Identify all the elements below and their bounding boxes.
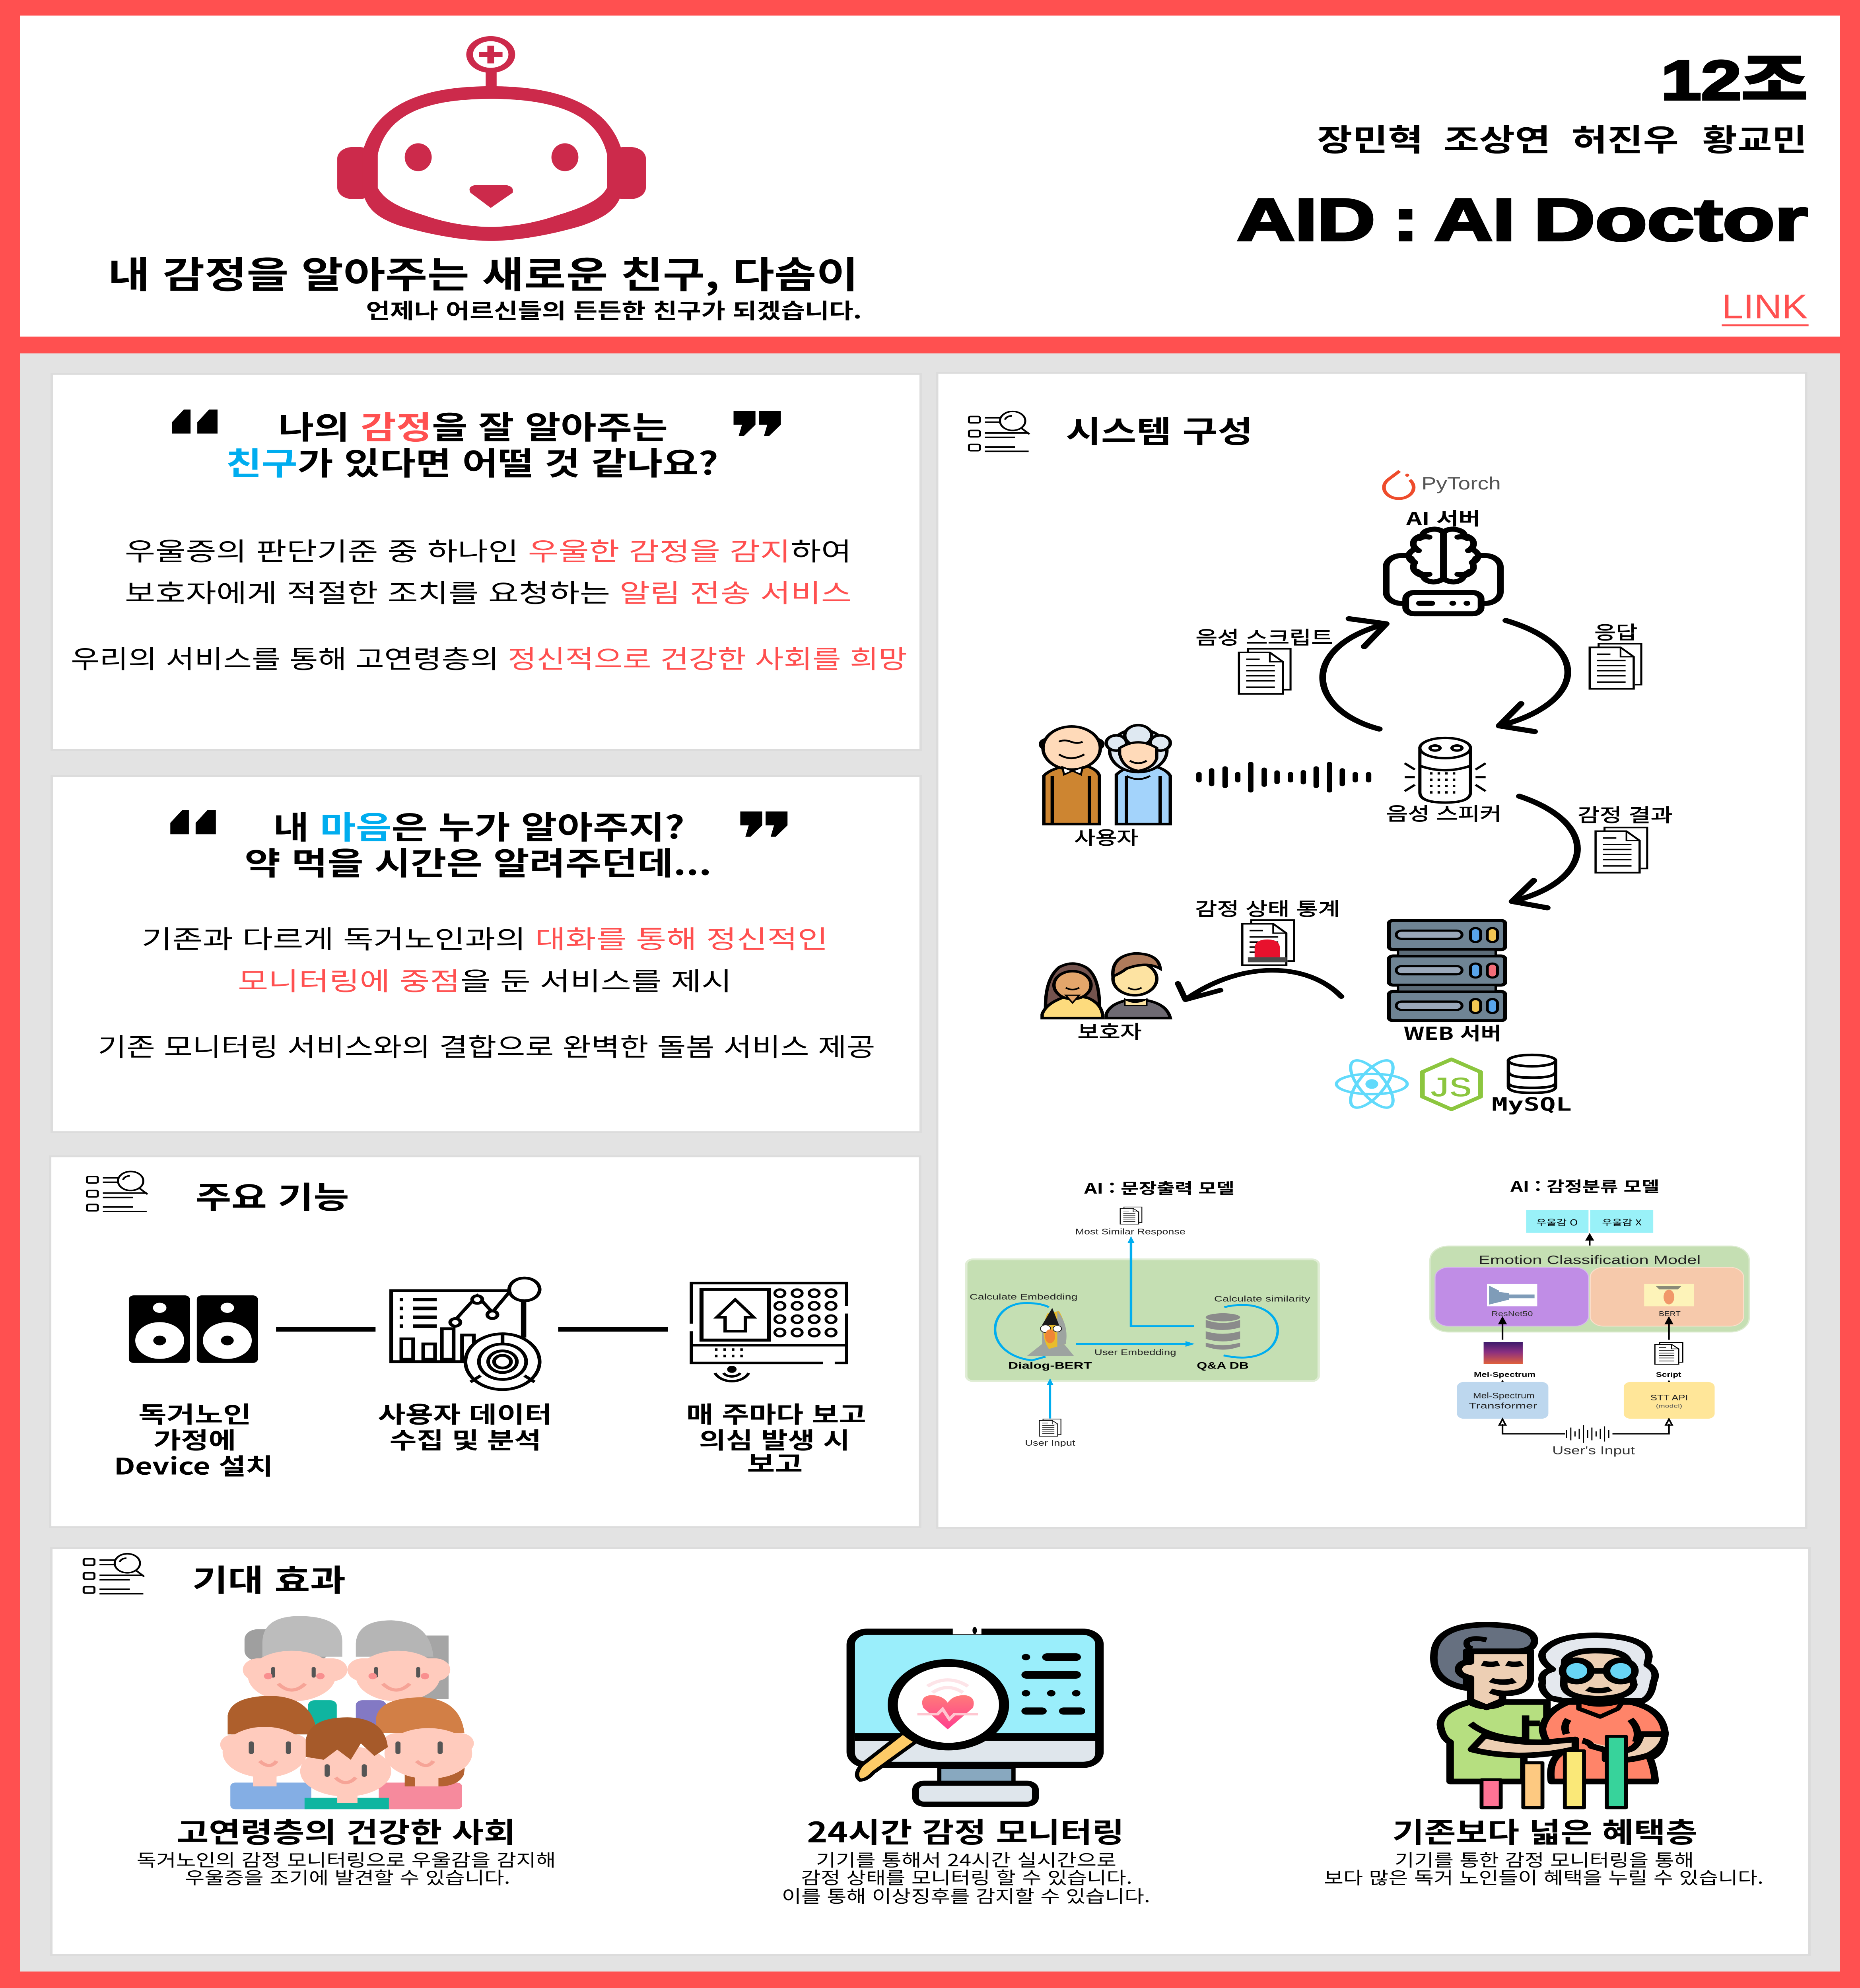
icon: checklist search [87, 1171, 148, 1211]
labels: 의심 발생 시 [699, 1423, 850, 1455]
icon: document [1239, 649, 1291, 694]
icon: guardians [1042, 953, 1170, 1018]
arrows: into model [1499, 1318, 1672, 1340]
effect 1 [136, 1810, 556, 1889]
icon: web server rack [1389, 920, 1505, 1021]
effect 2: 기기를 통해서 24시간 실시간으로 [816, 1846, 1116, 1872]
label: voice speaker: 음성 스피커 [1386, 799, 1502, 826]
label: calculate embedding: Calculate Embedding [970, 1293, 1078, 1302]
panel: system architecture [937, 373, 1806, 1528]
effect 1: 우울증을 조기에 발견할 수 있습니다. [185, 1864, 510, 1889]
body text: 기존과 다르게 독거노인과의 대화를 통해 정신적인 [142, 919, 828, 956]
arrow: AI server to speaker [1499, 621, 1568, 732]
label: emotion result: 감정 결과 [1578, 800, 1673, 827]
model box [1430, 1246, 1749, 1332]
team number: 12조 [1661, 49, 1808, 111]
illustration: healthy family [220, 1616, 474, 1809]
title: AI : 문장출력 모델 [1084, 1177, 1234, 1198]
icon: document [1596, 827, 1647, 873]
label: emotion classification model: Emotion Classification Model [1479, 1253, 1701, 1267]
logo: PyTorch: PyTorch [1422, 474, 1501, 493]
heading: 시스템 구성 [1066, 407, 1253, 451]
label: AI server: AI 서버 [1406, 505, 1481, 530]
arrows: upper [1499, 1381, 1672, 1390]
diagram: emotion classification model [1430, 1175, 1749, 1457]
output boxes: 우울감 X [1602, 1216, 1642, 1228]
heading line 1: 내 마음은 누가 알아주지? [273, 802, 685, 848]
icon: closing quote [734, 411, 781, 436]
icon: robot logo [337, 36, 646, 241]
icon: smart home hub [692, 1283, 847, 1381]
body text: 우울증의 판단기준 중 하나인 우울한 감정을 감지하여 [125, 531, 851, 568]
effect 2: 24시간 감정 모니터링 [807, 1810, 1124, 1850]
labels [114, 1396, 866, 1481]
team members: 조상연 [1444, 116, 1551, 160]
model box [966, 1259, 1319, 1381]
effect 3 [1324, 1810, 1763, 1889]
panel: intro question 1 [52, 374, 921, 750]
icon: audio wave [1567, 1425, 1609, 1443]
effect 3: 기존보다 넓은 혜택층 [1392, 1810, 1697, 1850]
project title [1237, 186, 1808, 253]
logo: MySQL: MySQL [1492, 1094, 1572, 1115]
effect 2: 이를 통해 이상징후를 감지할 수 있습니다. [782, 1883, 1150, 1908]
icon: document [1120, 1207, 1142, 1224]
label: calculate similarity: Calculate similarity [1214, 1294, 1311, 1303]
transformer box: Mel-Spectrum [1473, 1391, 1535, 1400]
illustration: helper and elder [1434, 1625, 1665, 1808]
arrow: speaker to AI server [1323, 619, 1386, 729]
STT box: (model) [1656, 1403, 1682, 1409]
output boxes: 우울감 O [1536, 1216, 1578, 1228]
label: user input: User Input [1025, 1439, 1075, 1448]
effect 2: 감정 상태를 모니터링 할 수 있습니다. [801, 1864, 1132, 1889]
ResNet block: ResNet50 [1491, 1310, 1533, 1318]
icon: speakers [129, 1295, 258, 1363]
BERT block [1590, 1268, 1743, 1326]
effect 2 [782, 1810, 1150, 1908]
label: web server: WEB 서버 [1404, 1019, 1502, 1045]
embedding loop left [995, 1303, 1049, 1361]
labels: 보고 [747, 1446, 803, 1479]
icon: voice wave [1199, 764, 1368, 790]
figure: Bert character [1026, 1308, 1074, 1356]
ResNet block [1435, 1268, 1588, 1326]
label: guardian: 보호자 [1078, 1017, 1142, 1044]
icon: smart speaker [1405, 738, 1486, 802]
logo: MySQL [1492, 1055, 1572, 1115]
icon: document [1655, 1343, 1683, 1364]
icon: database [1206, 1313, 1240, 1349]
project title: : [1393, 186, 1418, 253]
label: response: 응답 [1594, 618, 1637, 645]
team members: 황교민 [1703, 116, 1807, 160]
arrow: to output [1586, 1235, 1593, 1246]
heading line 1: 나의 감정을 잘 알아주는 [278, 402, 668, 448]
arrow: web server to guardian [1178, 970, 1341, 1000]
label: most similar response: Most Similar Response [1075, 1227, 1186, 1236]
subheadline: 언제나 어르신들의 든든한 친구가 되겠습니다. [366, 294, 862, 324]
input branches [1499, 1419, 1672, 1434]
effect 1: 독거노인의 감정 모니터링으로 우울감을 감지해 [136, 1846, 556, 1872]
icon: document [1590, 644, 1641, 689]
heading line 2: 친구가 있다면 어떨 것 같나요? [226, 438, 718, 484]
body text [98, 919, 875, 1064]
connector 2 [558, 1327, 668, 1332]
icon: data dashboard [391, 1278, 540, 1390]
output boxes [1526, 1210, 1653, 1233]
icon: opening quote [172, 410, 218, 434]
label: users input: User's Input [1552, 1444, 1635, 1457]
body text: 기존 모니터링 서비스와의 결합으로 완벽한 돌봄 서비스 제공 [98, 1027, 875, 1064]
body text: 모니터링에 중점을 둔 서비스를 제시 [238, 961, 732, 998]
heading: 주요 기능 [196, 1173, 349, 1217]
icon: checklist search [969, 412, 1030, 451]
title: AI : 감정분류 모델 [1510, 1175, 1659, 1196]
label: emotion statistics: 감정 상태 통계 [1195, 894, 1340, 921]
effect 3: 기기를 통한 감정 모니터링을 통해 [1395, 1846, 1694, 1872]
team members: 허진우 [1572, 116, 1679, 160]
icon: AI brain server [1386, 529, 1500, 614]
transformer box: Transformer [1469, 1402, 1537, 1411]
diagram: sentence output model [966, 1177, 1319, 1448]
body background [20, 353, 1840, 1972]
icon: alert document [1242, 920, 1294, 965]
heading line 2: 약 먹을 시간은 알려주던데... [245, 838, 711, 884]
icon: elderly users [1040, 725, 1170, 824]
panel: expected effects [51, 1548, 1809, 1955]
STT box: STT API [1650, 1393, 1688, 1402]
arrow: user embedding [1076, 1341, 1195, 1347]
body text: 보호자에게 적절한 조치를 요청하는 알림 전송 서비스 [125, 573, 851, 610]
BERT block: BERT [1659, 1310, 1681, 1318]
transformer box [1457, 1382, 1548, 1419]
header panel [20, 16, 1840, 337]
panel: intro question 2 [52, 776, 921, 1132]
logo: Node JS: JS [1430, 1072, 1472, 1103]
labels: 매 주마다 보고 [686, 1396, 866, 1429]
icon: checklist search [84, 1554, 144, 1594]
label: user: 사용자 [1074, 823, 1138, 850]
project title: Doctor [1534, 186, 1808, 253]
label: user embedding: User Embedding [1094, 1348, 1176, 1357]
labels: 수집 및 분석 [389, 1423, 541, 1455]
labels: 가정에 [154, 1423, 236, 1455]
logo: Node JS [1423, 1059, 1481, 1109]
icon: closing quote [740, 812, 787, 837]
illustration: monitor with heart [851, 1627, 1100, 1804]
label: mel spectrum: Mel-Spectrum [1474, 1371, 1535, 1378]
project title: AID [1237, 186, 1375, 253]
label: voice script: 음성 스크립트 [1195, 623, 1333, 649]
labels: Device 설치 [114, 1448, 273, 1481]
link: LINK [1722, 287, 1808, 326]
arrow: user input [1047, 1378, 1053, 1419]
label: Q&A DB: Q&A DB [1197, 1360, 1249, 1371]
label: dialog bert: Dialog-BERT [1008, 1360, 1092, 1371]
project title: AI [1434, 186, 1515, 253]
connector 1 [276, 1327, 375, 1332]
panel: key features [50, 1156, 920, 1527]
logo: PyTorch [1384, 471, 1501, 499]
team members [1317, 116, 1807, 160]
team members: 장민혁 [1317, 116, 1423, 160]
similarity loop right [1224, 1305, 1278, 1357]
icon: document [1039, 1419, 1061, 1436]
labels: 독거노인 [138, 1396, 251, 1429]
headline: 내 감정을 알아주는 새로운 친구, 다솜이 [108, 246, 858, 299]
body text [71, 531, 907, 676]
arrow: speaker to web server [1512, 796, 1577, 908]
label: script: Script [1656, 1371, 1681, 1378]
labels: 사용자 데이터 [378, 1396, 552, 1429]
output arrow [1127, 1236, 1194, 1326]
icon: opening quote [170, 810, 216, 834]
effect 3: 보다 많은 독거 노인들이 혜택을 누릴 수 있습니다. [1324, 1864, 1763, 1889]
effect 1: 고연령층의 건강한 사회 [177, 1810, 516, 1850]
logo: React [1336, 1056, 1407, 1112]
heading: 기대 효과 [192, 1556, 346, 1600]
mel spectrogram image [1484, 1342, 1523, 1364]
STT box [1624, 1382, 1714, 1419]
body text: 우리의 서비스를 통해 고연령층의 정신적으로 건강한 사회를 희망 [71, 639, 907, 676]
